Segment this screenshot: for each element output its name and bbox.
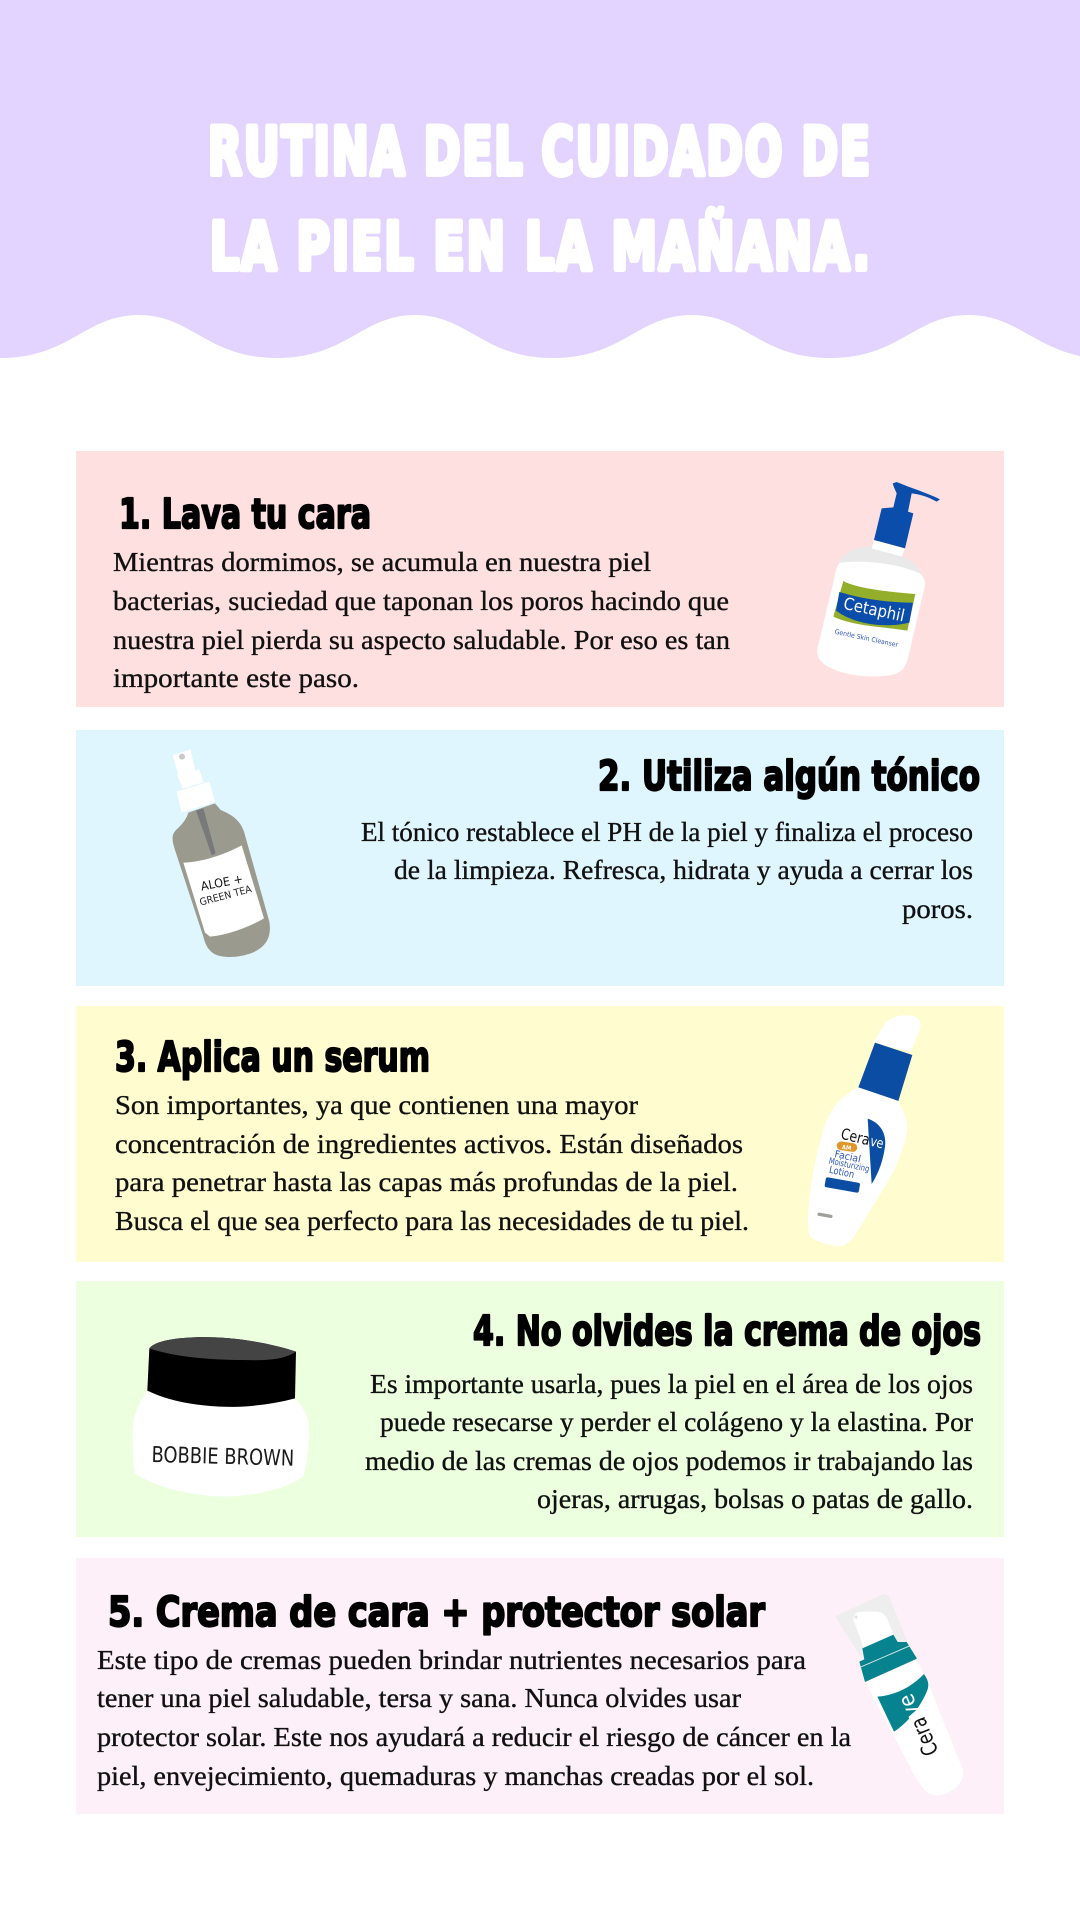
icon: CeraVe facial lotion bottle: Cera	[839, 1125, 872, 1149]
panel 5 heading: 5. Crema de cara + protector solar	[108, 1588, 766, 1636]
icon: CeraVe facial lotion bottle: Moisturizing	[828, 1156, 870, 1175]
panel 3 body text: Son importantes, ya que contienen una mayor	[115, 1090, 638, 1120]
panel 5 body text: tener una piel saludable, tersa y sana. Nunca olvides usar	[97, 1683, 741, 1713]
panel 3 heading: 3. Aplica un serum	[115, 1033, 430, 1081]
icon: CeraVe facial lotion bottle: AM	[841, 1144, 852, 1152]
panel 5 body text: Este tipo de cremas pueden brindar nutrientes necesarios para	[97, 1645, 806, 1675]
panel 5: crema y protector solar	[76, 1558, 1004, 1814]
icon: CeraVe facial lotion bottle: Lotion	[828, 1165, 855, 1181]
panel 5 background	[76, 1558, 1004, 1814]
panel 2 body text: El tónico restablece el PH de la piel y finaliza el proceso	[361, 817, 973, 847]
panel 4 body text: ojeras, arrugas, bolsas o patas de gallo.	[537, 1484, 973, 1514]
panel 5 body text: piel, envejecimiento, quemaduras y manchas creadas por el sol.	[97, 1761, 814, 1791]
title	[208, 115, 872, 285]
panel 4 body text: medio de las cremas de ojos podemos ir trabajando las	[365, 1446, 973, 1476]
panel 4: crema de ojos	[76, 1281, 1004, 1537]
panel 5 body text	[97, 1645, 851, 1791]
icon: Cetaphil cleanser bottle	[817, 482, 940, 676]
icon: CeraVe facial lotion bottle: ve	[868, 1134, 885, 1152]
panel 3: serum	[76, 1006, 1004, 1262]
panel 1 body text: nuestra piel pierda su aspecto saludable. Por eso es tan	[113, 625, 731, 655]
panel 3 body text	[115, 1090, 749, 1236]
panel 5 body text: protector solar. Este nos ayudará a reducir el riesgo de cáncer en la	[97, 1722, 851, 1752]
panel 1 body text: importante este paso.	[113, 663, 359, 693]
icon: Bobbie Brown cream jar: BOBBIE BROWN	[151, 1443, 294, 1472]
panel 3 background	[76, 1006, 1004, 1262]
icon: Bobbie Brown cream jar	[132, 1337, 309, 1497]
panel 4 body text: puede resecarse y perder el colágeno y la elastina. Por	[380, 1407, 973, 1437]
panel 1 body text: Mientras dormimos, se acumula en nuestra piel	[113, 547, 651, 577]
panel 2 body text: de la limpieza. Refresca, hidrata y ayuda a cerrar los	[394, 855, 973, 885]
icon: aloe and green tea spray bottle: ALOE +	[200, 872, 244, 894]
panel 1 body text: bacterias, suciedad que taponan los poros hacindo que	[113, 586, 729, 616]
panel 1 body text	[113, 547, 731, 693]
panel 1 background	[76, 451, 1004, 707]
icon: Cetaphil cleanser bottle: Gentle Skin Cleanser	[834, 628, 899, 649]
panel 2: tonico	[76, 730, 1004, 986]
panel 3 body text: para penetrar hasta las capas más profundas de la piel.	[115, 1167, 738, 1197]
icon: Cetaphil cleanser bottle: Cetaphil	[842, 594, 906, 625]
icon: aloe and green tea spray bottle: GREEN TEA	[199, 884, 253, 909]
panel 1: lava tu cara	[76, 451, 1004, 707]
panel 2 body text: poros.	[902, 894, 973, 924]
icon: CeraVe sunscreen tube	[835, 1594, 963, 1795]
panel 3 body text: concentración de ingredientes activos. Están diseñados	[115, 1129, 743, 1159]
icon: CeraVe sunscreen tube: ve	[894, 1690, 926, 1722]
panel 3 body text: Busca el que sea perfecto para las necesidades de tu piel.	[115, 1206, 749, 1236]
icon: CeraVe facial lotion bottle: Facial	[833, 1149, 862, 1165]
panel 4 background	[76, 1281, 1004, 1537]
panel 4 body text: Es importante usarla, pues la piel en el área de los ojos	[370, 1369, 973, 1399]
panel 2 body text	[361, 817, 973, 924]
panel 1 heading: 1. Lava tu cara	[119, 490, 371, 538]
icon: CeraVe sunscreen tube: Cera	[906, 1713, 944, 1759]
panel 4 body text	[365, 1369, 973, 1514]
icon: CeraVe facial lotion bottle	[808, 1015, 921, 1246]
panel 2 background	[76, 730, 1004, 986]
icon: aloe and green tea spray bottle	[173, 749, 270, 957]
header banner with wavy edge	[0, 0, 1080, 358]
